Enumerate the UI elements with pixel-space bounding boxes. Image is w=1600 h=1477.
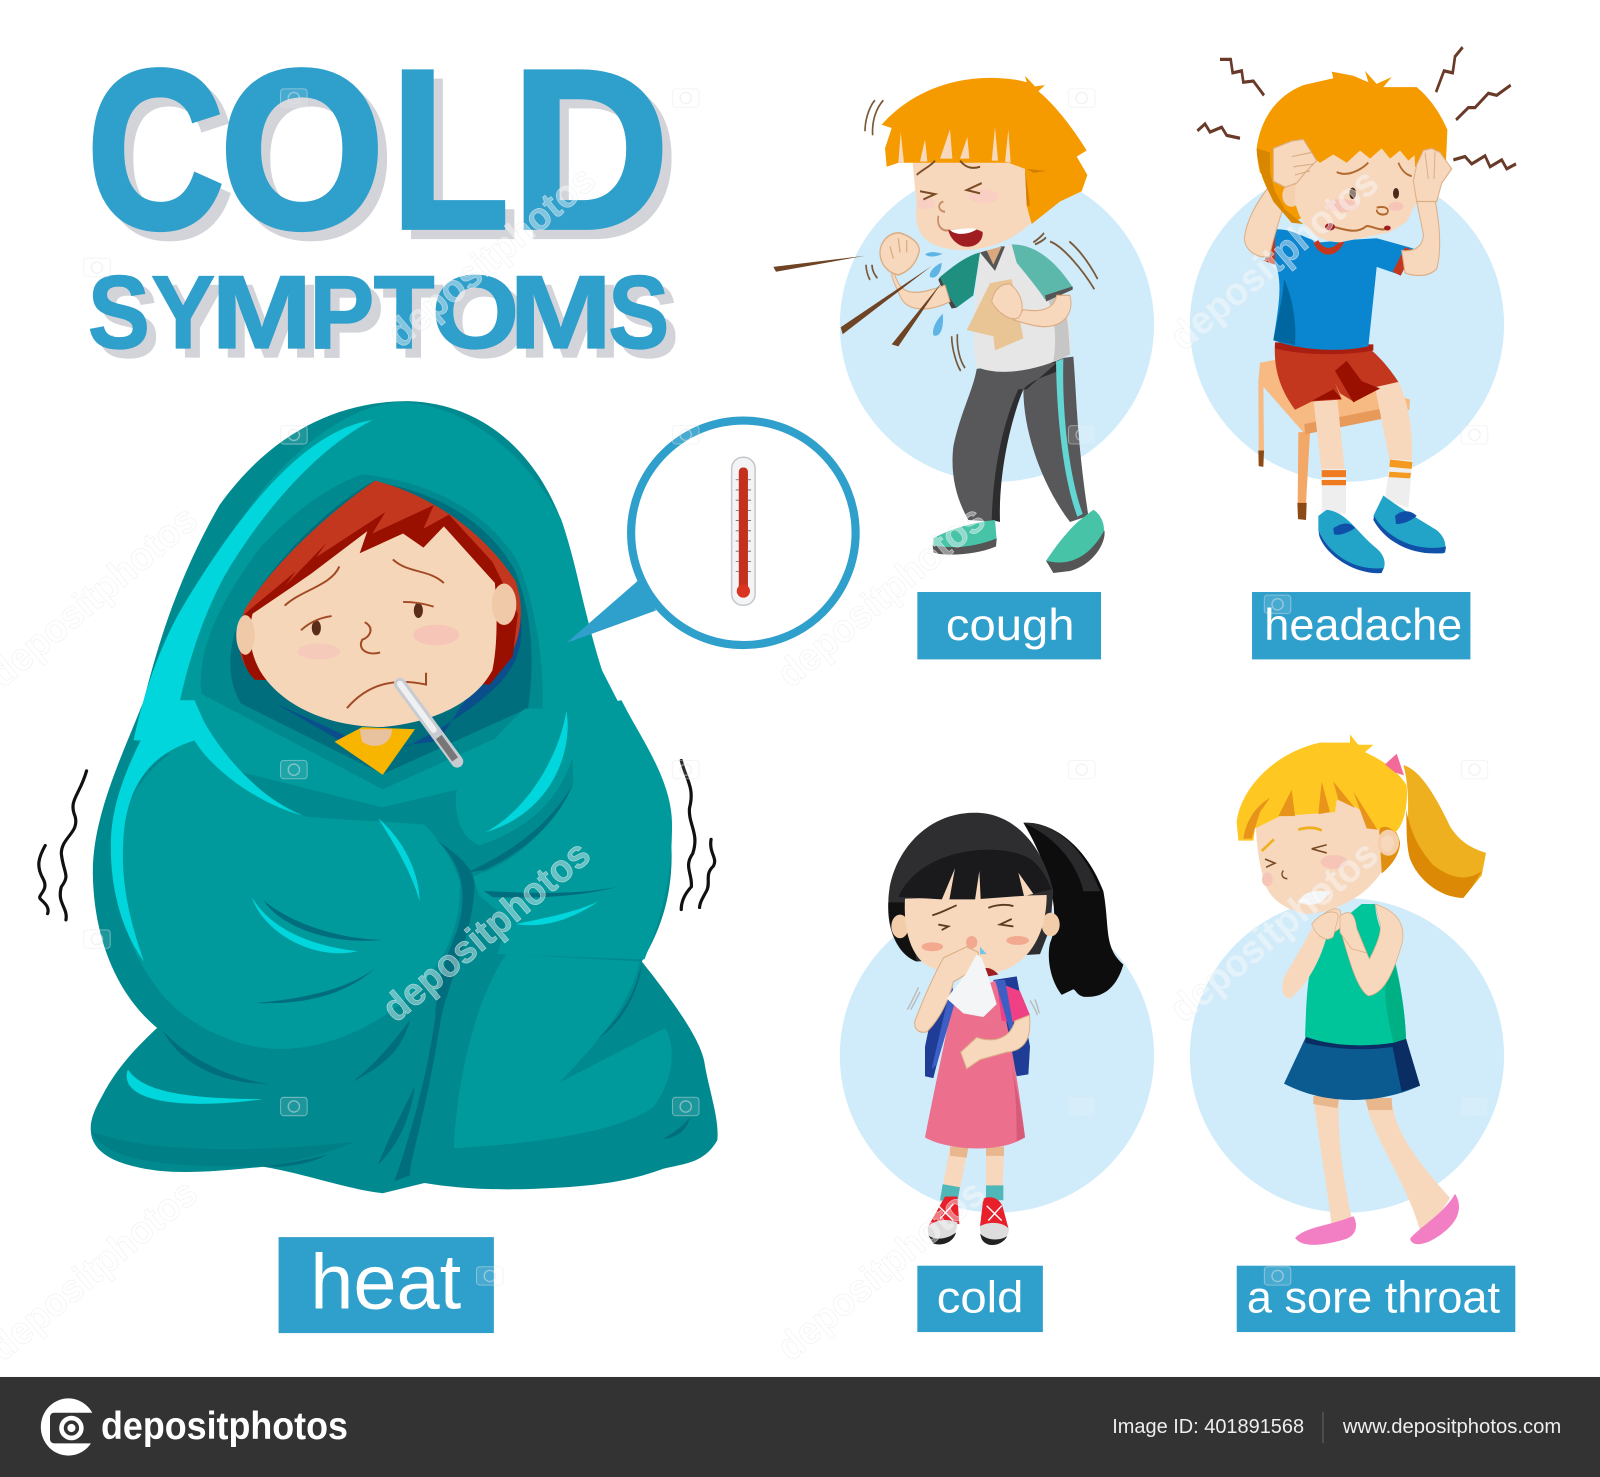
droplets: [925, 252, 943, 336]
label: headache: headache: [1264, 599, 1462, 650]
tissue at mouth: [1298, 891, 1330, 905]
shiver lines: [39, 760, 715, 920]
subtitle shadow: S: [97, 264, 159, 380]
panel: cough: [773, 76, 1154, 659]
label: cough: [917, 592, 1101, 659]
head: [888, 813, 1053, 962]
mouth: [948, 229, 983, 247]
hands on throat: [1312, 912, 1338, 939]
label: heat: heat: [310, 1240, 461, 1326]
word SYMPTOMS: M: [509, 255, 612, 371]
illustration: boy with headache on chair: [1197, 47, 1516, 573]
ponytail: [1403, 765, 1486, 898]
legs and shoes: [943, 1147, 968, 1189]
footer bar: [0, 1377, 1600, 1477]
word SYMPTOMS: S: [88, 255, 150, 371]
blanket bright highlights: [111, 700, 599, 1104]
watermark text: depositphotos: [769, 498, 994, 696]
watermark text: depositphotos: [769, 1171, 994, 1370]
watermark camera icons: [84, 89, 1488, 1285]
panel: cold: [840, 813, 1154, 1332]
cough stream lines: [773, 256, 943, 346]
title shadow: L: [400, 33, 518, 286]
label: a sore throat: [1237, 1266, 1515, 1332]
hood: [134, 402, 638, 807]
shirt: [1265, 229, 1413, 350]
background circle: [1190, 898, 1504, 1213]
subtitle shadow: [97, 264, 679, 380]
watermark text: depositphotos: [1162, 832, 1386, 1031]
title shadow: C: [96, 33, 234, 286]
icon: thermometer: [732, 457, 755, 605]
background circle: [840, 898, 1154, 1213]
subtitle shadow: T: [383, 264, 444, 380]
shirt collar: [335, 727, 415, 775]
legs: [1313, 393, 1345, 473]
subtitle shadow: S: [617, 264, 679, 380]
socks: [1322, 469, 1346, 514]
label: a sore throat: a sore throat: [1247, 1272, 1501, 1323]
top: [1305, 904, 1406, 1045]
head: [987, 246, 1002, 265]
hair: [882, 76, 1087, 224]
head: [1259, 91, 1447, 222]
shoes: [1318, 510, 1385, 573]
blanket silhouette: [91, 401, 718, 1193]
arms: [1244, 183, 1288, 257]
word SYMPTOMS: [88, 255, 669, 371]
legs and shoes: [1313, 1096, 1353, 1227]
illustration: girl holding her throat: [1237, 735, 1486, 1245]
panel: headache: [1190, 47, 1516, 659]
title shadow: D: [520, 33, 679, 286]
label: cough: cough: [946, 599, 1074, 650]
backpack straps: [932, 982, 955, 1069]
blanket dark folds: [162, 783, 690, 1181]
word COLD: O: [219, 24, 385, 277]
nose and tissue arm: [966, 936, 977, 949]
background circle: [840, 167, 1154, 482]
subtitle shadow: O: [441, 264, 529, 380]
blanket lower panels: [91, 700, 690, 1181]
subtitle shadow: Y: [160, 264, 224, 380]
word SYMPTOMS: S: [608, 255, 669, 371]
website: www.depositphotos.com: [1342, 1416, 1561, 1438]
title shadow: O: [229, 33, 394, 286]
skirt: [1284, 1037, 1420, 1100]
word SYMPTOMS: O: [432, 255, 519, 371]
shirt: [973, 244, 1071, 372]
word SYMPTOMS: T: [373, 255, 435, 371]
background circle: [1190, 167, 1504, 482]
word COLD: D: [511, 24, 669, 277]
label: cold: [917, 1266, 1043, 1332]
illustration: child wrapped in teal blanket with fever: [39, 401, 718, 1193]
illustration: coughing boy: [773, 76, 1105, 573]
title shadow: [96, 33, 679, 286]
subtitle shadow: M: [220, 264, 321, 380]
word COLD: [87, 24, 669, 277]
head: [1377, 825, 1400, 873]
logo wordmark: depositphotos: [101, 1405, 348, 1448]
shorts: [1275, 342, 1398, 410]
ponytail: [1023, 823, 1123, 997]
pants and shoes: [952, 357, 1088, 522]
pain zigzags: [1197, 47, 1516, 169]
word SYMPTOMS: M: [211, 255, 312, 371]
image id: Image ID: 401891568: [1112, 1416, 1304, 1438]
motion lines: [865, 100, 1098, 371]
arms: [1340, 904, 1403, 996]
word SYMPTOMS: P: [309, 255, 374, 371]
title: COLD SYMPTOMS: [87, 24, 679, 380]
head and face: [236, 481, 521, 727]
label: heat: [279, 1237, 494, 1333]
illustration: girl blowing nose: [888, 813, 1123, 1245]
callout: thermometer bubble: [566, 421, 856, 645]
arms and tissue: [967, 279, 1023, 351]
arm and hand on belly: [961, 1015, 1030, 1069]
watermark text: [0, 158, 1386, 1370]
word SYMPTOMS: Y: [151, 255, 215, 371]
word COLD: L: [391, 24, 509, 277]
label: cold: cold: [937, 1272, 1023, 1323]
subtitle shadow: P: [318, 264, 384, 380]
icon: camera logo: [41, 1398, 97, 1456]
oral thermometer: [400, 684, 457, 761]
panel: a sore throat: [1190, 735, 1515, 1332]
watermark text: depositphotos: [374, 832, 599, 1031]
label: headache: [1252, 592, 1470, 659]
watermark text: depositphotos: [1162, 161, 1386, 359]
word COLD: C: [87, 24, 224, 277]
watermark text: depositphotos: [379, 158, 604, 356]
chair: [1258, 360, 1410, 434]
subtitle shadow: M: [518, 264, 621, 380]
dress: [925, 980, 1025, 1148]
backpack: [925, 999, 953, 1078]
